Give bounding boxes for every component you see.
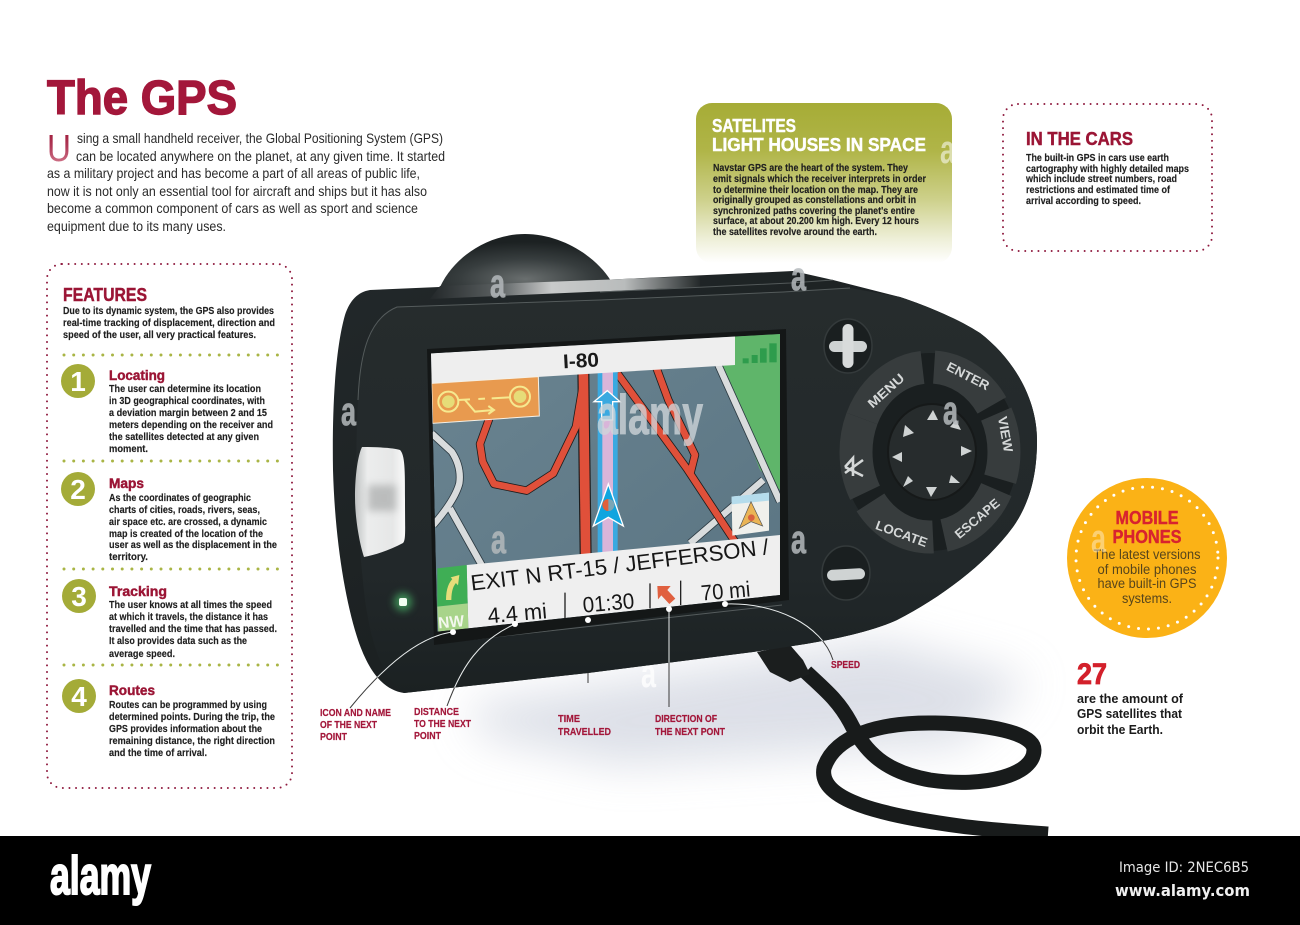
satellites heading: SATELITES bbox=[712, 116, 796, 136]
footer bar bbox=[0, 836, 1300, 925]
screen bezel bbox=[427, 329, 789, 645]
feature 4: routes: remaining distance, the right direction bbox=[109, 736, 275, 747]
feature 2: maps: air space etc. are crossed, a dynamic bbox=[109, 517, 267, 528]
silver top strip bbox=[430, 276, 700, 299]
label: direction bbox=[655, 713, 725, 738]
feature 2: maps: map is created of the location of the bbox=[109, 529, 263, 540]
intro text block bbox=[47, 128, 445, 234]
watermarks: a bbox=[791, 780, 807, 824]
minus button bbox=[822, 546, 870, 600]
badge: mobile phones: PHONES bbox=[1112, 527, 1182, 547]
feature 3: tracking: average speed. bbox=[109, 649, 175, 660]
leader lines outside device bbox=[350, 604, 833, 708]
intro text block: as a military project and has become a part of all areas of public life, bbox=[47, 165, 420, 181]
red roads bbox=[480, 367, 735, 557]
current position marker bbox=[593, 484, 623, 526]
cars body: restrictions and estimated time of bbox=[1026, 185, 1171, 196]
stat: 27 satellites: orbit the Earth. bbox=[1077, 722, 1163, 737]
intro text block: sing a small handheld receiver, the Global Positioning System (GPS) bbox=[77, 130, 443, 146]
feature 3: tracking: The user knows at all times the speed bbox=[109, 600, 272, 611]
button: mute bbox=[845, 367, 1004, 537]
button: view bbox=[856, 367, 1016, 537]
watermarks: a bbox=[341, 390, 357, 434]
label: icon and name: OF THE NEXT bbox=[320, 719, 377, 731]
device front face bbox=[356, 288, 1037, 693]
badge: mobile phones: The latest versions bbox=[1094, 547, 1201, 562]
satellites body: surface, at about 20.200 km high. Every 12 hours bbox=[713, 216, 919, 227]
feature 2: maps: user as well as the displacement in the bbox=[109, 540, 277, 551]
feature 1: locating: moment. bbox=[109, 444, 148, 455]
button: escape: ESCAPE bbox=[952, 495, 1003, 542]
next turn icon bbox=[437, 565, 468, 632]
feature 2: maps: charts of cities, roads, rivers, seas, bbox=[109, 505, 260, 516]
road name: I-80 bbox=[562, 349, 600, 373]
satellites body: originally grouped as constellations and orbit in bbox=[713, 195, 916, 206]
features intro: real-time tracking of displacement, direction and bbox=[63, 318, 275, 329]
next turn icon: NW bbox=[438, 613, 466, 632]
direction arrow bbox=[657, 586, 675, 604]
feature 1: locating bbox=[61, 364, 273, 455]
features intro bbox=[63, 306, 275, 341]
feature 3: tracking: at which it travels, the distance it has bbox=[109, 612, 268, 623]
intro text block: now it is not only an essential tool for aircraft and ships but it has also bbox=[47, 183, 427, 199]
watermarks: a bbox=[641, 652, 657, 696]
status LED bbox=[394, 593, 412, 611]
label: distance: POINT bbox=[414, 730, 441, 742]
satellites heading: LIGHT HOUSES IN SPACE bbox=[712, 135, 926, 155]
feature 4: routes: 4 bbox=[71, 681, 87, 712]
feature 4: routes: Routes bbox=[109, 682, 155, 698]
watermarks: a bbox=[1091, 517, 1107, 561]
orange route icon bbox=[432, 377, 539, 423]
distance readout: 4.4 mi bbox=[487, 598, 548, 628]
stat: 27 satellites: 27 bbox=[1077, 658, 1107, 691]
button: escape bbox=[856, 367, 1004, 542]
label: icon and name: POINT bbox=[320, 731, 347, 743]
badge: mobile phones: systems. bbox=[1122, 591, 1172, 606]
feature 4: routes: GPS provides information about the bbox=[109, 724, 262, 735]
device body bbox=[333, 271, 1037, 693]
drop cap: U bbox=[47, 128, 71, 170]
speed readout: 70 mi bbox=[700, 576, 751, 606]
button: enter: ENTER bbox=[944, 359, 993, 393]
button: view: VIEW bbox=[995, 415, 1016, 454]
label: distance: DISTANCE bbox=[414, 706, 459, 718]
leader lines on device bbox=[377, 603, 824, 688]
title: The GPS bbox=[47, 72, 237, 125]
button: enter bbox=[856, 359, 1004, 537]
feature 1: locating: 1 bbox=[70, 366, 86, 397]
power cable bbox=[757, 645, 1048, 834]
arrow ahead bbox=[594, 391, 620, 420]
features heading: FEATURES bbox=[63, 285, 147, 305]
features intro: speed of the user, all very practical features. bbox=[63, 330, 256, 341]
navigation pad bbox=[842, 353, 1018, 551]
white roads bbox=[432, 365, 780, 565]
panel: features bbox=[47, 264, 292, 788]
features intro: Due to its dynamic system, the GPS also provides bbox=[63, 306, 274, 317]
watermarks: a bbox=[940, 128, 956, 172]
next point name: EXIT N RT-15 / JEFFERSON / bbox=[469, 534, 771, 596]
intro text block: can be located anywhere on the planet, at any given time. It started bbox=[76, 148, 445, 164]
cable connector bbox=[757, 645, 810, 682]
badge: mobile phones: have built-in GPS bbox=[1098, 576, 1196, 591]
satellites body: emit signals which the receiver interprets in order bbox=[713, 174, 926, 185]
cars body: cartography with highly detailed maps bbox=[1026, 164, 1189, 175]
badge: mobile phones: of mobile phones bbox=[1098, 562, 1197, 577]
button: menu bbox=[856, 367, 1004, 537]
watermarks: a bbox=[791, 518, 807, 562]
satellites body: synchronized paths covering the planet's entire bbox=[713, 206, 915, 217]
website: www.alamy.com bbox=[1115, 881, 1250, 900]
label: icon and name bbox=[320, 707, 391, 743]
watermarks: a bbox=[490, 262, 506, 306]
watermarks: a bbox=[491, 518, 507, 562]
label: speed: SPEED bbox=[831, 659, 860, 671]
cars body: which include street numbers, road bbox=[1025, 174, 1177, 185]
watermarks: a bbox=[943, 389, 959, 433]
signal bars bbox=[743, 343, 777, 363]
badge: mobile phones: MOBILE bbox=[1116, 508, 1178, 528]
feature 4: routes: and the time of arrival. bbox=[109, 748, 207, 759]
label: direction: THE NEXT PONT bbox=[655, 726, 725, 738]
feature 3: tracking: 3 bbox=[71, 581, 87, 612]
feature 1: locating: Locating bbox=[109, 367, 165, 383]
feature 1: locating: a deviation margin between 2 and 15 bbox=[109, 408, 267, 419]
feature 2: maps: territory. bbox=[109, 552, 148, 563]
lower info panel bbox=[467, 535, 780, 628]
feature 3: tracking: It also provides data such as the bbox=[109, 636, 247, 647]
stat: 27 satellites: are the amount of bbox=[1077, 691, 1184, 706]
feature 2: maps bbox=[61, 472, 277, 563]
leader anchor dots bbox=[450, 601, 728, 635]
stat: 27 satellites bbox=[1077, 658, 1184, 737]
cars heading: IN THE CARS bbox=[1026, 129, 1133, 149]
map background bbox=[431, 334, 780, 632]
badge: mobile phones bbox=[1067, 478, 1227, 638]
feature 4: routes bbox=[62, 679, 275, 759]
green park area bbox=[722, 334, 780, 490]
blue route bbox=[598, 367, 618, 553]
watermarks bbox=[341, 128, 1107, 824]
label: icon and name: ICON AND NAME bbox=[320, 707, 391, 719]
feature 2: maps: 2 bbox=[70, 474, 86, 505]
watermarks: a bbox=[791, 255, 807, 299]
feature 1: locating: the satellites detected at any given bbox=[109, 432, 259, 443]
panel: in the cars bbox=[1003, 104, 1212, 251]
label: time travelled: TRAVELLED bbox=[558, 726, 611, 738]
image id: Image ID: 2NEC6B5 bbox=[1119, 860, 1249, 876]
button: locate bbox=[856, 367, 1004, 550]
floor shadow bbox=[470, 640, 1030, 765]
cars body: The built-in GPS in cars use earth bbox=[1026, 153, 1169, 164]
label: time travelled: TIME bbox=[558, 713, 580, 725]
panel: satellites bbox=[696, 103, 952, 263]
footer logo: alamy bbox=[50, 846, 151, 906]
time readout: 01:30 bbox=[582, 588, 635, 618]
watermarks: alamy bbox=[597, 383, 703, 446]
top title bar bbox=[431, 336, 735, 383]
satellites body: to determine their location on the map. They are bbox=[713, 185, 918, 196]
feature 1: locating: The user can determine its location bbox=[109, 384, 261, 395]
satellites body: Navstar GPS are the heart of the system. They bbox=[713, 163, 908, 174]
satellites body: the satellites revolve around the earth. bbox=[713, 227, 877, 238]
feature 3: tracking bbox=[62, 579, 277, 660]
cars body bbox=[1025, 153, 1189, 207]
feature 4: routes: determined points. During the trip, the bbox=[109, 712, 275, 723]
icon: camera dome bbox=[440, 234, 611, 287]
side button bbox=[355, 447, 405, 557]
feature 2: maps: Maps bbox=[109, 475, 144, 491]
feature 2: maps: As the coordinates of geographic bbox=[109, 493, 251, 504]
feature 1: locating: meters depending on the receiver and bbox=[109, 420, 273, 431]
satellites heading bbox=[712, 116, 926, 155]
intro text block: become a common component of cars as well as sport and science bbox=[47, 200, 418, 216]
screen: navigation map bbox=[431, 334, 780, 632]
feature 1: locating: in 3D geographical coordinates, with bbox=[109, 396, 265, 407]
plus button bbox=[824, 319, 872, 373]
stat: 27 satellites: GPS satellites that bbox=[1077, 706, 1183, 721]
feature 3: tracking: Tracking bbox=[109, 583, 167, 599]
point of interest icon bbox=[732, 493, 769, 536]
label: distance bbox=[414, 706, 471, 742]
feature 4: routes: Routes can be programmed by using bbox=[109, 700, 267, 711]
button: locate: LOCATE bbox=[874, 517, 930, 550]
label: distance: TO THE NEXT bbox=[414, 718, 471, 730]
label: time travelled bbox=[558, 713, 611, 738]
feature 3: tracking: travelled and the time that has passed. bbox=[109, 624, 277, 635]
directional disk bbox=[888, 404, 976, 500]
satellites body bbox=[713, 163, 926, 238]
cars body: arrival according to speed. bbox=[1026, 196, 1141, 207]
intro text block: equipment due to its many uses. bbox=[47, 218, 226, 234]
button: menu: MENU bbox=[865, 370, 907, 411]
label: direction: DIRECTION OF bbox=[655, 713, 717, 725]
